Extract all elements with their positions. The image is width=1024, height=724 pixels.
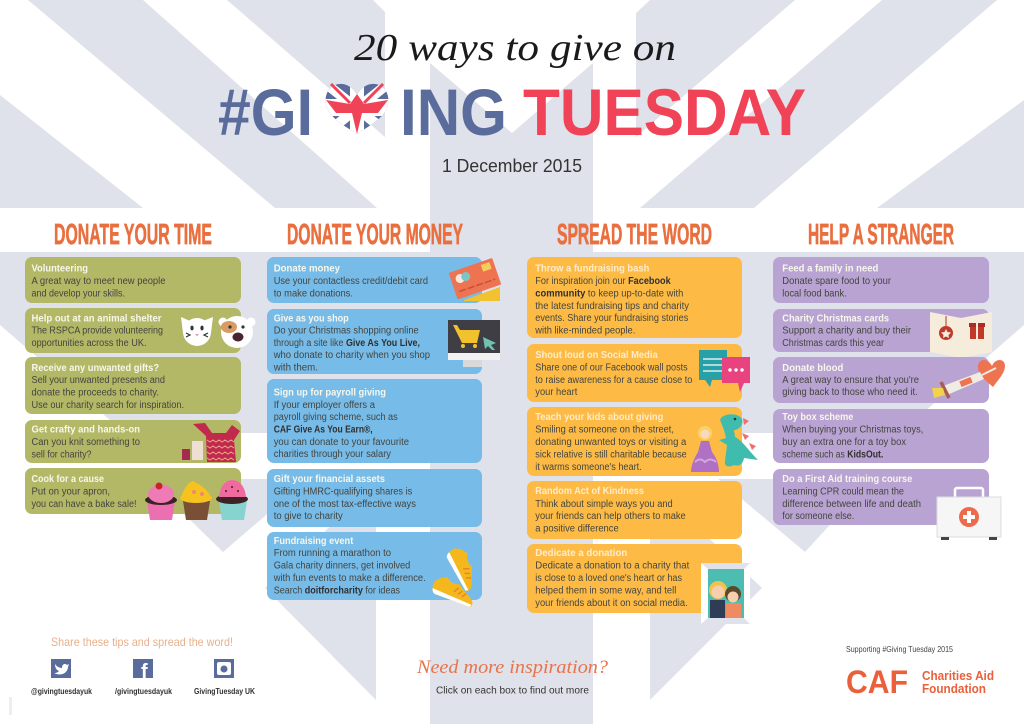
panel: help a stranger column <box>773 257 1005 540</box>
icon: dog <box>218 316 256 348</box>
social handle: facebook: /givingtuesdayuk <box>115 687 172 696</box>
card: get crafty: Can you knit something to <box>32 437 140 448</box>
card: financial assets: to give to charity <box>274 511 343 522</box>
card: dedicate a donation: is close to a loved one's heart or has <box>535 573 682 584</box>
icon: cat <box>181 317 213 346</box>
card: cook for a cause: Cook for a cause <box>32 473 104 485</box>
card: cook for a cause: you can have a bake sale! <box>32 499 136 510</box>
card: toy box: scheme such as KidsOut. <box>782 450 883 460</box>
icon: green dinosaur <box>719 414 758 466</box>
card: dedicate a donation: helped them in some way, and tell <box>535 586 676 596</box>
card: unwanted gifts: Use our charity search for inspiration. <box>32 400 184 411</box>
card: feed a family: Feed a family in need <box>782 262 878 274</box>
card: financial assets: one of the most tax-effective ways <box>274 499 416 510</box>
card: get crafty: Get crafty and hands-on <box>32 424 140 436</box>
card: fundraising event: Search doitforcharity for ideas <box>274 586 400 596</box>
card: give as you shop <box>267 309 500 374</box>
logo: Charities Aid Foundation <box>846 664 994 700</box>
title: #Giving Tuesday logotype: ING <box>400 75 507 149</box>
card: christmas cards: Support a charity and buy their <box>782 326 912 336</box>
title: #Giving Tuesday logotype <box>219 83 805 136</box>
card: teach your kids: donating unwanted toys or visiting a <box>535 437 687 448</box>
card: social media: your heart <box>535 387 578 398</box>
card: random act of kindness: a positive difference <box>535 524 619 534</box>
card: donate blood: Donate blood <box>782 362 843 374</box>
card: feed a family: Donate spare food to your <box>782 276 892 287</box>
card: first aid: Do a First Aid training course <box>782 473 912 485</box>
card: fundraising bash: events. Share your fundraising stories <box>535 313 688 324</box>
icon: running shoes <box>430 544 483 608</box>
card: random act of kindness: Think about simple ways you and <box>535 499 673 510</box>
card: give as you shop: through a site like Give As You Live, <box>274 338 420 349</box>
card: first aid: difference between life and death <box>782 499 921 510</box>
card: toy box <box>773 409 989 463</box>
card: fundraising bash <box>527 257 742 338</box>
icon: union jack heart <box>326 83 388 134</box>
card: give as you shop: Give as you shop <box>274 312 349 324</box>
card: christmas cards <box>773 309 992 358</box>
date: 1 December 2015 <box>442 156 582 176</box>
card: volunteering <box>25 257 241 303</box>
title: #Giving Tuesday logotype: #GI <box>218 75 313 149</box>
card: get crafty: sell for charity? <box>32 450 92 460</box>
card: animal shelter: Help out at an animal shelter <box>32 312 162 324</box>
card: unwanted gifts: Receive any unwanted gifts? <box>32 362 159 374</box>
card: dedicate a donation: your friends about it on social media. <box>535 598 688 609</box>
card: dedicate a donation <box>527 544 750 624</box>
heading: donate your money: DONATE YOUR MONEY <box>287 219 463 251</box>
card: financial assets <box>267 469 482 527</box>
card: payroll giving <box>267 379 482 463</box>
card: first aid <box>773 469 1001 540</box>
heading: spread the word: SPREAD THE WORD <box>557 219 712 251</box>
card: volunteering: A great way to meet new people <box>32 276 166 287</box>
card: unwanted gifts: Sell your unwanted presents and <box>32 375 165 386</box>
card: random act of kindness: your friends can help others to make <box>535 511 686 522</box>
card: teach your kids: sick relative is still charitable because <box>535 450 687 460</box>
card: feed a family <box>773 257 989 303</box>
card: donate money <box>267 257 501 303</box>
card: fundraising bash: with like-minded people. <box>534 326 635 336</box>
card: donate money: Use your contactless credit/debit card <box>274 276 428 287</box>
text: share prompt: Share these tips and spread the word! <box>51 635 233 649</box>
logo: Charities Aid Foundation: CAF <box>846 664 908 700</box>
card: donate money: to make donations. <box>274 288 353 300</box>
card: social media: Shout loud on Social Media <box>535 349 658 361</box>
card: animal shelter: The RSPCA provide volunteering <box>32 326 163 336</box>
card: random act of kindness <box>527 481 742 539</box>
card: donate blood: A great way to ensure that you're <box>782 375 919 386</box>
social handle: instagram: GivingTuesday UK <box>194 687 255 696</box>
card: dedicate a donation: Dedicate a donation <box>535 547 627 559</box>
card: animal shelter <box>25 308 256 353</box>
card: teach your kids: it warms someone's heart. <box>535 462 642 473</box>
panel: donate your money column <box>267 257 501 608</box>
text: need more inspiration: Need more inspiration? <box>416 657 609 678</box>
card: fundraising event: with fun events to make a difference. <box>273 573 426 584</box>
text: supporting line: Supporting #Giving Tuesday 2015 <box>846 645 953 654</box>
card: first aid: Learning CPR could mean the <box>782 486 904 498</box>
card: fundraising bash: Throw a fundraising bash <box>535 262 649 274</box>
card: payroll giving: Sign up for payroll giving <box>274 386 386 398</box>
icon: cupcakes <box>145 480 248 520</box>
card: unwanted gifts: donate the proceeds to charity. <box>32 388 159 398</box>
card: fundraising event: Fundraising event <box>274 535 354 547</box>
icon: first aid kit <box>937 488 1001 540</box>
card: payroll giving: charities through your salary <box>274 449 391 460</box>
text: click on each box: Click on each box to find out more <box>436 686 589 696</box>
card: toy box: Toy box scheme <box>782 411 853 423</box>
heading: donate your time: DONATE YOUR TIME <box>54 219 212 251</box>
icon: twitter <box>51 659 71 678</box>
card: christmas cards: Charity Christmas cards <box>782 312 889 324</box>
card: payroll giving: you can donate to your favourite <box>274 437 409 448</box>
card: animal shelter: opportunities across the UK. <box>32 338 146 349</box>
icon: syringe and heart <box>932 360 1005 398</box>
card: christmas cards: Christmas cards this year <box>782 338 885 349</box>
card: social media: to raise awareness for a cause close to <box>535 375 693 386</box>
card: financial assets: Gifting HMRC-qualifying shares is <box>274 486 412 498</box>
card: teach your kids: Smiling at someone on the street, <box>535 424 674 436</box>
card: fundraising bash: For inspiration join our Facebook <box>535 276 671 287</box>
icon: princess doll <box>691 426 719 472</box>
card: get crafty <box>25 420 241 463</box>
card: toy box: When buying your Christmas toys, <box>782 424 923 436</box>
icon: instagram <box>214 659 234 678</box>
card: give as you shop: with them. <box>273 362 318 374</box>
card: payroll giving: CAF Give As You Earn®, <box>274 424 373 436</box>
white heading band <box>0 208 1024 252</box>
card: give as you shop: who donate to charity when you shop <box>273 350 430 361</box>
card: donate money: Donate money <box>274 262 340 274</box>
card: payroll giving: If your employer offers a <box>274 400 375 411</box>
card: teach your kids <box>527 407 758 476</box>
card: random act of kindness: Random Act of Kindness <box>535 485 644 497</box>
icon: computer with cart <box>448 320 500 367</box>
icon: speech bubbles <box>699 350 750 392</box>
logo: Charities Aid Foundation: Foundation <box>922 682 986 696</box>
card: unwanted gifts <box>25 357 241 414</box>
icon: christmas card <box>930 312 992 358</box>
card: fundraising event: From running a marathon to <box>274 548 391 559</box>
icon: facebook: f <box>141 661 148 683</box>
logo: Charities Aid Foundation: Charities Aid <box>922 669 994 683</box>
card: give as you shop: Do your Christmas shopping online <box>274 326 419 336</box>
card: cook for a cause <box>25 468 248 520</box>
card: cook for a cause: Put on your apron, <box>32 486 110 498</box>
card: first aid: for someone else. <box>782 511 854 522</box>
title: #Giving Tuesday logotype: TUESDAY <box>523 75 806 149</box>
card: fundraising bash: the latest fundraising tips and charity <box>535 301 689 312</box>
card: fundraising event <box>267 532 483 608</box>
title: 20 ways to give on: 20 ways to give on <box>354 27 676 69</box>
card: dedicate a donation: Dedicate a donation to a charity that <box>535 560 690 572</box>
panel: donate your time column <box>25 257 256 520</box>
social handle: twitter: @givingtuesdayuk <box>31 687 92 696</box>
icon: credit cards <box>449 258 501 301</box>
card: teach your kids: Teach your kids about giving <box>535 411 663 423</box>
icon: facebook <box>133 659 153 683</box>
panel: spread the word column <box>527 257 758 624</box>
card: financial assets: Gift your financial assets <box>274 473 385 485</box>
card: volunteering: and develop your skills. <box>32 288 125 300</box>
card: donate blood: giving back to those who need it. <box>782 387 918 398</box>
card: toy box: buy an extra one for a toy box <box>782 437 906 448</box>
card: feed a family: local food bank. <box>782 288 847 300</box>
icon: knitted jumper and yarn <box>182 423 240 462</box>
card: fundraising bash: community to keep up-to-date with <box>535 288 683 300</box>
card: donate blood <box>773 357 1005 403</box>
card: social media <box>527 344 750 402</box>
card: payroll giving: payroll giving scheme, such as <box>274 412 398 423</box>
card: social media: Share one of our Facebook wall posts <box>535 362 688 374</box>
icon: framed photo <box>701 563 750 624</box>
card: fundraising event: Gala charity dinners, get involved <box>274 560 410 572</box>
card: volunteering: Volunteering <box>32 262 88 274</box>
